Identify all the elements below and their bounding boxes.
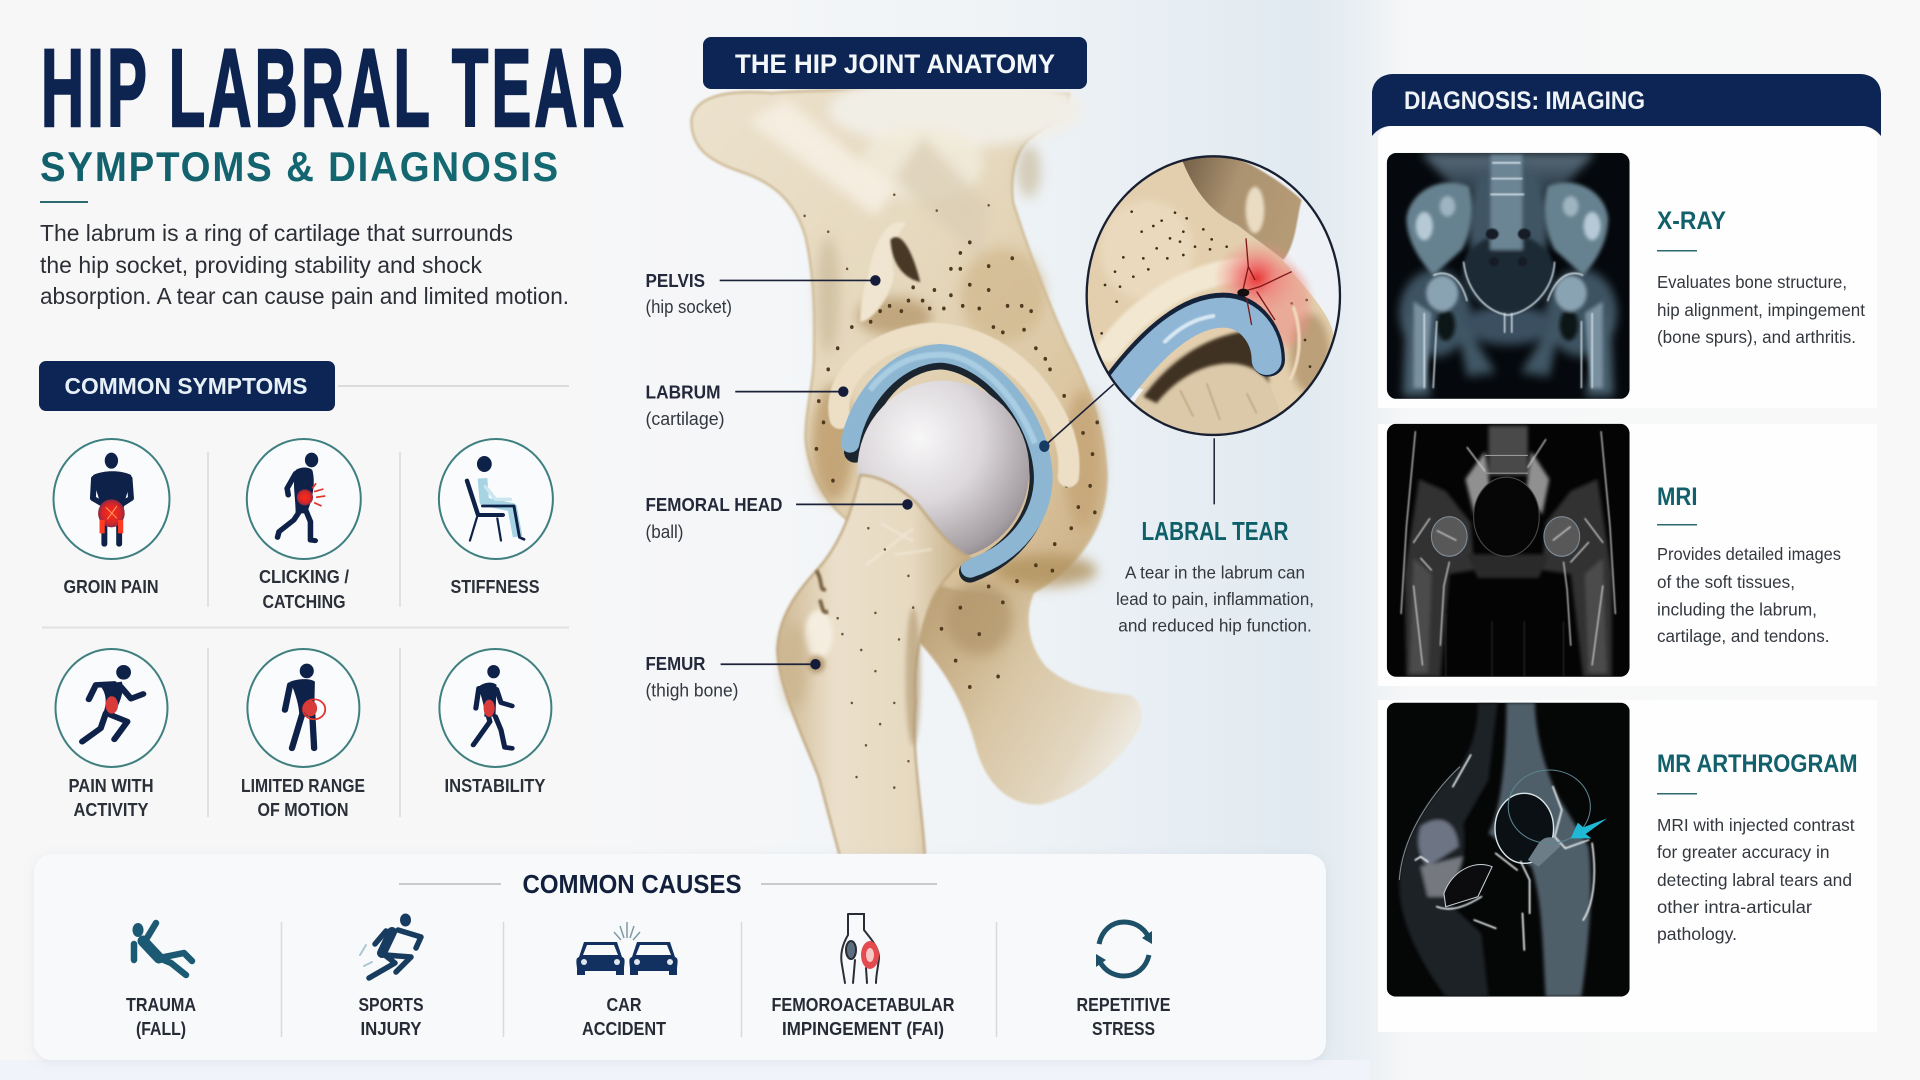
symptom: instability: INSTABILITY: [444, 776, 546, 796]
imaging: mri text: Provides detailed images: [1657, 544, 1841, 564]
bone pores in lens: [1102, 212, 1310, 367]
hip socket: rim, labrum and femoral head: [839, 333, 1069, 572]
panel: common causes: [34, 854, 1326, 1060]
label: femoral head: FEMORAL HEAD: [646, 495, 782, 515]
label: femoral head: (ball): [646, 522, 684, 542]
imaging: mr arthrogram text: for greater accuracy in: [1657, 842, 1830, 862]
label: pelvis: (hip socket): [646, 297, 732, 317]
femur details: [805, 610, 833, 658]
imaging: mri text: including the labrum,: [1657, 600, 1817, 620]
pale rim above labrum: [1108, 270, 1240, 350]
cause: trauma: (FALL): [136, 1019, 186, 1039]
callout: labral tear: LABRAL TEAR: [1142, 516, 1289, 546]
cause: car accident: [576, 922, 678, 1039]
callout: labral tear: lead to pain, inflammation,: [1116, 589, 1314, 609]
cause: car accident: ACCIDENT: [582, 1019, 666, 1039]
label: labrum: [646, 382, 724, 429]
imaging: mr arthrogram text: detecting labral tears and: [1657, 870, 1852, 890]
intro paragraph: absorption. A tear can cause pain and limited motion.: [40, 283, 569, 309]
imaging: mri text: cartilage, and tendons.: [1657, 626, 1830, 646]
intro paragraph: [40, 220, 569, 309]
labrum in lens: [1117, 309, 1268, 389]
label: pelvis: PELVIS: [646, 271, 705, 291]
imaging: mri text: [1657, 483, 1841, 646]
imaging: x-ray image: [1387, 153, 1630, 399]
imaging: mr arthrogram text: other intra-articular: [1657, 897, 1812, 917]
bone pores: [816, 242, 1097, 687]
arthrogram contrast lines: [1415, 755, 1594, 950]
heading: the hip joint anatomy: [703, 37, 1087, 89]
pelvis lower part (ischium): [919, 576, 1142, 805]
symptom: stiffness: STIFFNESS: [450, 577, 540, 597]
symptom: stiffness: [439, 439, 553, 597]
panel header: DIAGNOSIS: IMAGING: [1404, 87, 1645, 115]
pelvis shading: [748, 73, 1102, 655]
imaging: x-ray text: [1657, 207, 1865, 347]
cause: repetitive stress: REPETITIVE: [1076, 995, 1170, 1015]
imaging: mri image: [1387, 424, 1630, 677]
symptom: pain with activity: [56, 649, 168, 820]
panel cards: [1378, 126, 1877, 1032]
symptom: pain with activity: PAIN WITH: [68, 776, 154, 796]
symptom: limited range of motion: [241, 649, 365, 820]
imaging: mr arthrogram text: MR ARTHROGRAM: [1657, 750, 1858, 778]
symptom: groin pain: GROIN PAIN: [64, 577, 158, 597]
common symptoms heading: [39, 361, 569, 411]
symptom: groin pain: [54, 439, 170, 597]
imaging: mr arthrogram text: MRI with injected contrast: [1657, 815, 1855, 835]
intro paragraph: the hip socket, providing stability and shock: [40, 252, 482, 278]
callout: labral tear: [1116, 516, 1314, 636]
symptom: clicking / catching: CATCHING: [262, 592, 346, 612]
x-ray detail lines: [1424, 163, 1592, 388]
panel: diagnosis imaging: [1372, 74, 1881, 1032]
label: femur: FEMUR: [646, 654, 706, 674]
causes dividers: [282, 922, 996, 1037]
symptom: limited range of motion: LIMITED RANGE: [241, 776, 365, 796]
symptom: pain with activity: ACTIVITY: [74, 800, 148, 820]
label: femur: [646, 654, 738, 700]
subtitle rule: [40, 201, 88, 203]
redness: [1217, 242, 1296, 310]
imaging: mr arthrogram image: [1387, 703, 1630, 997]
imaging: mri text: of the soft tissues,: [1657, 572, 1795, 592]
anatomy illustration: hip bone: [691, 73, 1142, 805]
label: pelvis: [646, 271, 732, 317]
imaging: mr arthrogram text: [1657, 750, 1858, 944]
cause: repetitive stress: STRESS: [1092, 1019, 1155, 1039]
cause: trauma: TRAUMA: [126, 995, 196, 1015]
anatomy pointer lines: [720, 275, 1214, 670]
socket dark gap: [855, 358, 1041, 572]
symptoms grid dividers: [42, 452, 569, 817]
femoral head: [857, 381, 1029, 559]
imaging: x-ray text: Evaluates bone structure,: [1657, 272, 1847, 292]
pelvis notch: [860, 222, 906, 322]
symptom: limited range of motion: OF MOTION: [258, 800, 348, 820]
symptom: instability: [439, 649, 551, 796]
label: femoral head: [646, 495, 782, 542]
symptom: clicking / catching: [247, 439, 361, 612]
subtitle: SYMPTOMS & DIAGNOSIS: [40, 143, 560, 190]
rear bone structure: [1178, 153, 1302, 260]
causes heading: COMMON CAUSES: [522, 869, 742, 899]
mri streaks: [1401, 432, 1615, 665]
imaging: mri text: MRI: [1657, 483, 1698, 511]
panel header: [1372, 74, 1881, 136]
femur: [777, 475, 970, 856]
heading: the hip joint anatomy: THE HIP JOINT ANATOMY: [735, 49, 1055, 79]
common symptoms heading: COMMON SYMPTOMS: [64, 373, 308, 399]
imaging: x-ray text: X-RAY: [1657, 207, 1726, 235]
acetabular rim: [839, 333, 1069, 477]
callout: labral tear: A tear in the labrum can: [1125, 562, 1305, 582]
labrum: [850, 353, 1043, 568]
cause: femoroacetabular impingement: FEMOROACETABULAR: [772, 995, 954, 1015]
magnified labral tear lens: [1080, 150, 1350, 440]
cause: sports injury: INJURY: [360, 1019, 422, 1039]
symptom: clicking / catching: CLICKING /: [259, 567, 349, 587]
tear cracks: [1243, 238, 1292, 325]
cause: sports injury: [358, 914, 424, 1039]
main bone in lens: [1080, 150, 1333, 417]
cause: femoroacetabular impingement: IMPINGEMENT (FAI): [782, 1019, 944, 1039]
cause: trauma: [126, 923, 196, 1039]
imaging: mr arthrogram text: pathology.: [1657, 924, 1737, 944]
label: labrum: (cartilage): [646, 409, 724, 429]
intro paragraph: The labrum is a ring of cartilage that surrounds: [40, 220, 513, 246]
label: femur: (thigh bone): [646, 680, 738, 700]
label: labrum: LABRUM: [646, 382, 720, 402]
arthrogram arrow: [1571, 818, 1607, 838]
femur in lens: [1134, 389, 1276, 434]
cause: repetitive stress: [1076, 922, 1170, 1039]
imaging: x-ray text: (bone spurs), and arthritis.: [1657, 327, 1856, 347]
cause: car accident: CAR: [606, 995, 642, 1015]
cause: femoroacetabular impingement: [772, 914, 954, 1039]
pelvis main body: [691, 90, 1107, 593]
title: HIP LABRAL TEAR: [41, 27, 627, 150]
cause: sports injury: SPORTS: [358, 995, 424, 1015]
callout: labral tear: and reduced hip function.: [1118, 616, 1312, 636]
imaging: x-ray text: hip alignment, impingement: [1657, 300, 1865, 320]
